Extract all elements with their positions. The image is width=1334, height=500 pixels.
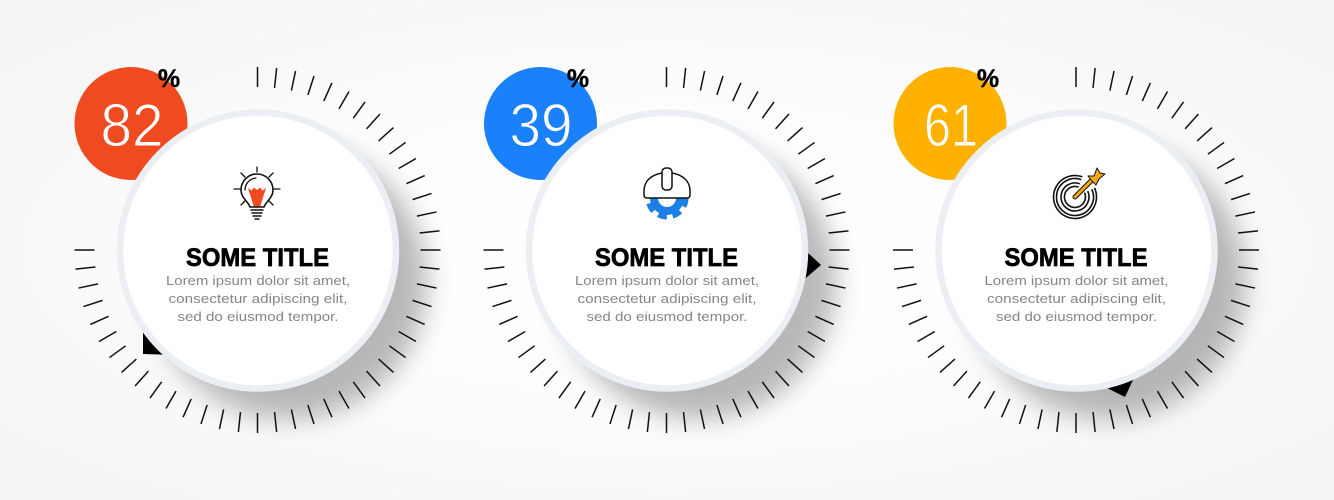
white circle (529, 112, 805, 388)
circle shadow (151, 143, 427, 419)
badge: 61 (894, 67, 1006, 180)
icon: light bulb (234, 167, 280, 219)
white circle (938, 112, 1214, 388)
description: Lorem ipsum dolor sit amet, (984, 274, 1168, 288)
title: SOME TITLE (595, 244, 738, 272)
circle shadow (970, 143, 1246, 419)
dial marker (793, 239, 821, 289)
badge: 61: 61 (924, 92, 978, 159)
description: Lorem ipsum dolor sit amet, (166, 274, 350, 288)
description: consectetur adipiscing elit, (168, 292, 348, 306)
panel: 82 percent dial (74, 65, 441, 433)
description (984, 274, 1168, 324)
description: sed do eiusmod tempor. (586, 310, 748, 324)
icon: helmet and gear (644, 168, 690, 217)
tick dial (74, 67, 441, 433)
dial marker (143, 325, 175, 355)
badge: 82: 82 (100, 92, 164, 159)
circle shadow (560, 143, 836, 419)
icon: target with arrow (1054, 168, 1105, 218)
percent sign: % (567, 65, 589, 93)
description: Lorem ipsum dolor sit amet, (575, 274, 759, 288)
tick dial (484, 67, 850, 433)
panel: 61 percent dial (893, 65, 1259, 433)
description: consectetur adipiscing elit, (987, 292, 1166, 306)
white circle (120, 112, 396, 388)
percent sign: % (158, 65, 180, 93)
title: SOME TITLE (1004, 244, 1148, 272)
description: sed do eiusmod tempor. (178, 310, 338, 324)
description: sed do eiusmod tempor. (996, 310, 1157, 324)
panel: 39 percent dial (484, 65, 850, 433)
tick dial (893, 67, 1259, 433)
percent sign: % (977, 65, 999, 93)
description (575, 274, 759, 324)
badge: 39: 39 (510, 92, 572, 159)
title: SOME TITLE (186, 244, 329, 272)
description: consectetur adipiscing elit, (578, 292, 756, 306)
description (166, 274, 350, 324)
dial marker (1098, 372, 1137, 397)
badge: 39 (484, 67, 597, 180)
badge: 82 (74, 67, 188, 180)
